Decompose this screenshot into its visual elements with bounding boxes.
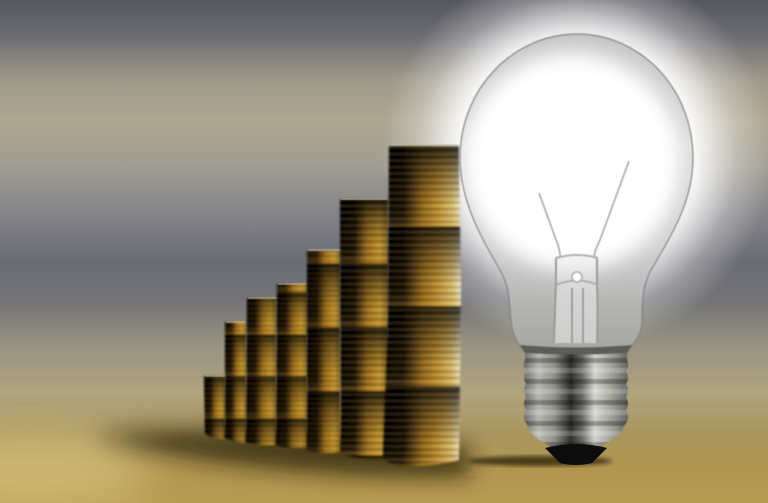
coin stack 7: [383, 146, 461, 466]
floor shadow under coins: [95, 431, 470, 477]
coin stack 2: [225, 322, 246, 443]
background glow: floor highlight at lower left: [0, 430, 150, 503]
bulb glass stem: [554, 255, 598, 343]
coin stack 3: [246, 298, 276, 445]
bulb filament support wires: [539, 161, 629, 258]
background glow: light halo around bulb: [370, 0, 768, 360]
bulb dark collar: [520, 345, 632, 354]
coin stack 6: [340, 199, 388, 458]
coin stack 4: [276, 284, 307, 448]
bulb screw base: [524, 347, 628, 450]
bulb glass outline: [460, 34, 693, 351]
coin stack 5: [307, 251, 340, 453]
coin stack top edges: [205, 145, 458, 376]
bulb bright glow inside glass: [466, 52, 678, 268]
chart: coin stacks rising left to right: [204, 145, 461, 466]
icon: light bulb: [460, 34, 693, 465]
coin stack 1: [204, 376, 225, 439]
bulb glass envelope: [460, 34, 693, 351]
floor shadow under bulb: [468, 456, 612, 466]
bulb contact tip: [545, 444, 607, 465]
